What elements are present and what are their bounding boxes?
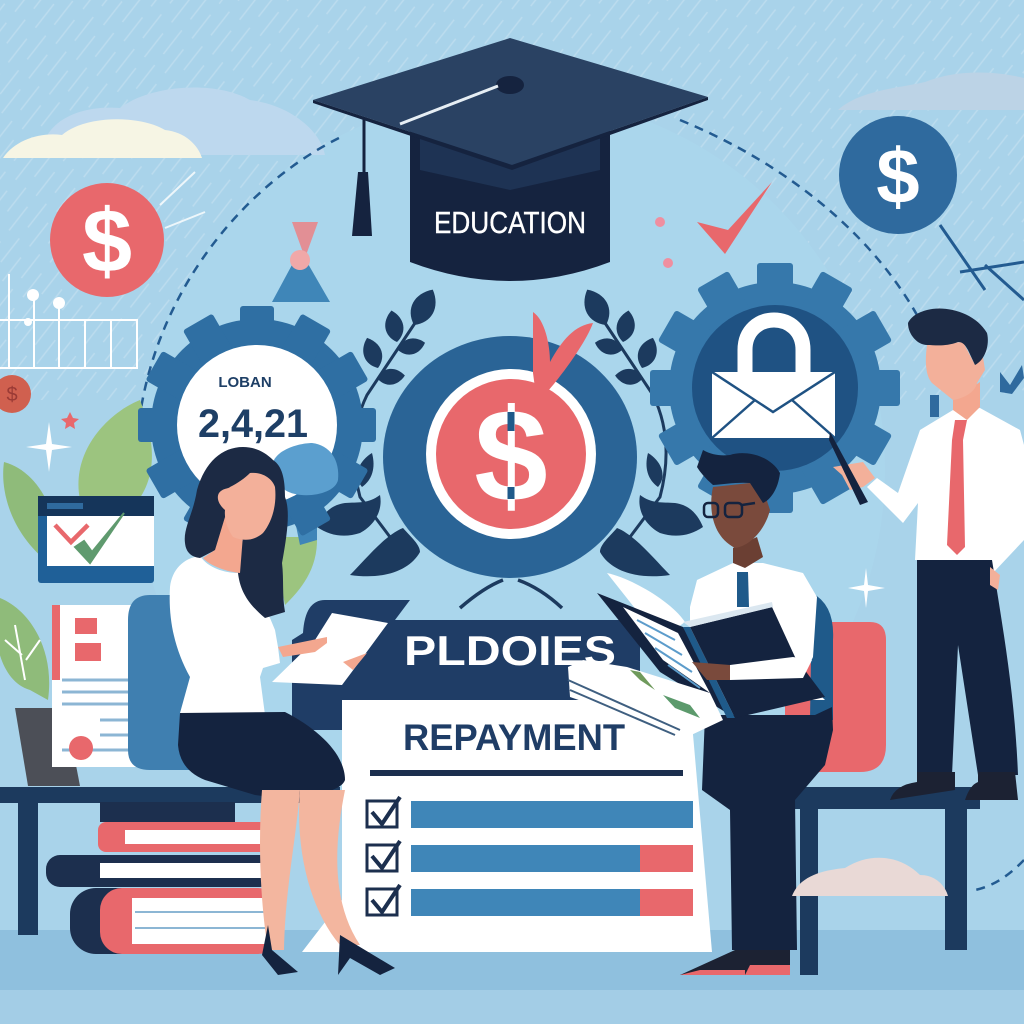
decorative dots <box>61 217 673 429</box>
books <box>46 802 280 954</box>
banner: policies: PLDOIES <box>404 627 616 674</box>
calendar <box>38 496 154 583</box>
chart sketch left <box>0 274 137 368</box>
banner: policies <box>292 600 640 730</box>
person: man reading <box>680 450 833 975</box>
card heading: REPAYMENT <box>403 717 625 758</box>
icon: small coin <box>0 375 31 413</box>
graduation cap <box>313 38 708 281</box>
lower laurel leaves <box>350 528 670 576</box>
gear left <box>138 306 376 544</box>
icon: red dollar coin <box>50 172 205 297</box>
cap label: EDUCATION <box>434 205 586 240</box>
gear right <box>650 263 900 513</box>
gear label: LOBAN <box>218 374 272 391</box>
checklist row 3 <box>367 885 693 916</box>
sparkles <box>26 422 885 608</box>
document stack left <box>52 605 182 767</box>
chair left <box>128 595 200 770</box>
icon: red dollar coin: $ <box>82 192 132 292</box>
centre medallion <box>383 312 637 578</box>
icon: hourglass <box>272 222 330 302</box>
person: standing man <box>829 308 1024 800</box>
clouds <box>3 72 1024 158</box>
person: woman <box>170 447 395 975</box>
open book <box>568 573 825 737</box>
checklist row 1 <box>367 797 693 828</box>
cloud blob by head <box>272 443 338 495</box>
icon: blue dollar coin <box>839 116 957 234</box>
icon: padlock envelope <box>712 320 835 438</box>
dashed arc <box>136 120 1024 890</box>
check mark on medallion <box>533 312 593 403</box>
repayment card <box>302 700 712 952</box>
icon: blue dollar coin: $ <box>876 132 920 220</box>
table <box>0 787 980 975</box>
centre medallion: $ <box>474 382 548 529</box>
cloud lower right <box>792 858 948 896</box>
red chair right <box>785 593 886 772</box>
plant pot <box>15 708 80 786</box>
check mark top <box>697 182 772 254</box>
laurel wreath <box>317 284 703 608</box>
icon: top-right roof lines <box>930 225 1024 417</box>
checklist row 2 <box>367 841 693 872</box>
gear left: 2,4,21 <box>198 402 308 446</box>
plant left <box>0 400 317 700</box>
icon: small coin: $ <box>6 384 18 406</box>
